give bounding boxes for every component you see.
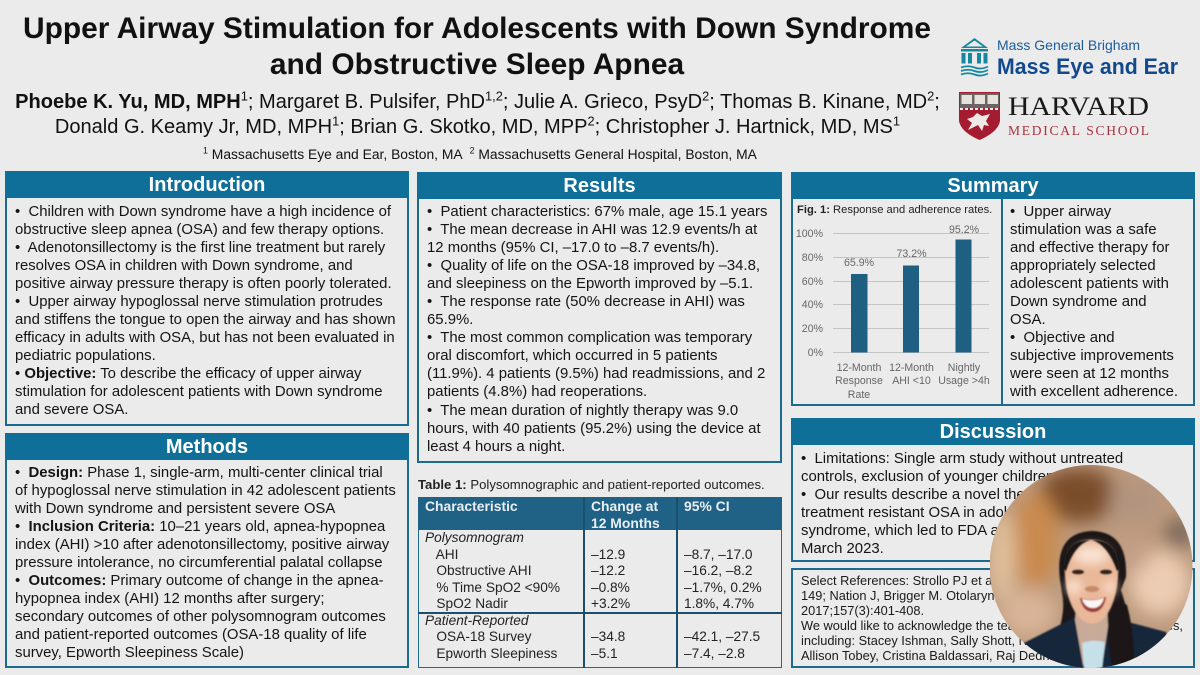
text: discussion bullets: • Limitations: Single arm study without untreated xyxy=(801,450,1123,466)
logo: Harvard Medical School xyxy=(959,91,1149,140)
text: summary bullets: stimulation was a safe xyxy=(1010,222,1156,238)
text: methods bullets: and patient-reported outcomes (OSA-18 quality of life xyxy=(15,627,367,643)
text: introduction bullets: and severe OSA. xyxy=(15,402,128,418)
text: summary bullets: • Objective and xyxy=(1010,330,1115,346)
header label: Change at xyxy=(591,498,658,514)
heading: results xyxy=(417,172,782,199)
text: summary bullets: and effective therapy for xyxy=(1010,240,1170,256)
text: summary bullets xyxy=(1010,204,1178,400)
title xyxy=(23,12,931,81)
text: results bullets: 65.9%. xyxy=(427,312,473,328)
text: results bullets: (11.9%). 4 patients (9.5%) had readmissions, and 2 xyxy=(427,366,765,382)
text: references: 149; Nation J, Brigger M. Otolaryng xyxy=(801,588,1002,603)
text: summary bullets: with excellent adherence. xyxy=(1010,384,1178,400)
text: discussion bullets: syndrome, which led to FDA approval in xyxy=(801,523,1063,539)
y axis labels: 100% xyxy=(796,228,824,240)
category labels xyxy=(835,362,990,401)
text: introduction bullets: obstructive sleep apnea (OSA) and few therapy options. xyxy=(15,222,384,238)
category labels: Rate xyxy=(848,389,870,401)
text: discussion bullets: • Our results describe a novel therapy for xyxy=(801,487,1075,503)
text: introduction bullets: resolves OSA in children with Down syndrome, and xyxy=(15,258,353,274)
photo: presenter portrait in circular frame xyxy=(990,465,1192,668)
confidence interval values: –42.1, –27.5 xyxy=(684,629,760,644)
text: summary bullets: subjective improvements xyxy=(1010,348,1174,364)
text: methods bullets: • Outcomes: Primary outcome of change in the apnea- xyxy=(15,573,384,589)
panel: methods xyxy=(5,433,409,668)
text: results bullets: • The response rate (50% decrease in AHI) was xyxy=(427,294,745,310)
panel: results xyxy=(417,172,782,463)
y axis labels xyxy=(796,228,824,359)
logo: Mass General Brigham Mass Eye and Ear xyxy=(960,37,1178,79)
title: Upper Airway Stimulation for Adolescents with Down Syndrome xyxy=(23,12,931,45)
text: results bullets: least 4 hours a night. xyxy=(427,439,565,455)
bar value labels: 73.2% xyxy=(896,248,927,260)
change column values: +3.2% xyxy=(591,596,630,611)
text: introduction bullets: • Objective: To describe the efficacy of upper airway xyxy=(15,366,362,382)
header label xyxy=(591,498,660,531)
change column values xyxy=(591,547,630,661)
confidence interval values: –7.4, –2.8 xyxy=(684,646,745,661)
hair parting xyxy=(1063,540,1090,571)
heading: discussion xyxy=(791,418,1195,445)
text: methods bullets: hypopnea index (AHI) 12 months after surgery; xyxy=(15,591,325,607)
neck xyxy=(1074,612,1110,666)
bar chart: response and adherence rates xyxy=(796,224,990,401)
text: summary bullets: OSA. xyxy=(1010,312,1046,328)
text: results bullets: • Quality of life on the OSA-18 improved by –34.8, xyxy=(427,258,760,274)
category labels: Nightly xyxy=(948,362,981,374)
first column labels: Polysomnogram xyxy=(425,530,524,545)
text: discussion bullets: controls, exclusion of younger children. xyxy=(801,469,1058,485)
first column labels: Obstructive AHI xyxy=(436,563,532,578)
text: references: including: Stacey Ishman, Sally Shott, N xyxy=(801,633,1028,648)
panel: introduction xyxy=(5,171,409,426)
y axis labels: 60% xyxy=(802,276,824,288)
panel: discussion xyxy=(791,418,1195,562)
logo: Harvard Medical School: MEDICAL SCHOOL xyxy=(1008,123,1149,138)
nose xyxy=(1085,586,1099,592)
face xyxy=(1065,540,1118,624)
category labels: Response xyxy=(835,375,883,387)
confidence interval values: –8.7, –17.0 xyxy=(684,547,752,562)
authors: Donald G. Keamy Jr, MD, MPH1; Brian G. Skotko, MD, MPP2; Christopher J. Hartnick, MD, MS1 xyxy=(55,113,900,138)
first column labels: OSA-18 Survey xyxy=(436,629,532,644)
first column labels: AHI xyxy=(436,547,458,562)
bar value labels: 65.9% xyxy=(844,257,875,269)
text: introduction bullets: pediatric populations. xyxy=(15,348,156,364)
logo: Harvard Medical School: HARVARD xyxy=(1008,91,1149,121)
text: methods bullets: secondary outcomes of other polysomnogram outcomes xyxy=(15,609,386,625)
divider between figure and text xyxy=(1001,199,1003,406)
header labels: Characteristic xyxy=(425,498,518,514)
text: references: We would like to acknowledge the teams at all participating xyxy=(801,618,1135,633)
confidence interval values xyxy=(684,547,762,661)
first column labels: Patient-Reported xyxy=(425,613,528,628)
heading: introduction: Introduction xyxy=(149,174,265,196)
text: introduction bullets: • Upper airway hypoglossal nerve stimulation protrudes xyxy=(15,294,383,310)
change column values: –34.8 xyxy=(591,629,625,644)
text: introduction bullets: positive airway pressure therapy is often poorly tolerated. xyxy=(15,276,392,292)
text: results bullets: patients (4.8%) had reoperations. xyxy=(427,384,647,400)
text: introduction bullets: efficacy in adults with OSA, but has not been evaluated in xyxy=(15,330,395,346)
text: methods bullets: of hypoglossal nerve stimulation in 42 adolescent patients xyxy=(15,483,396,499)
y axis labels: 80% xyxy=(802,252,824,264)
heading: methods: Methods xyxy=(166,436,248,458)
bars xyxy=(851,240,972,352)
text: results bullets: hours, with 40 patients (95.2%) using the device at xyxy=(427,421,761,437)
bar value labels: 95.2% xyxy=(949,224,980,236)
authors xyxy=(15,88,940,138)
change column values: –12.2 xyxy=(591,563,625,578)
blurred background xyxy=(988,468,1196,637)
text: end of acknowledgement line: sites, xyxy=(1153,618,1183,633)
text: references: Select References: Strollo PJ et al. xyxy=(801,573,999,588)
heading: discussion: Discussion xyxy=(940,421,1046,443)
row divider xyxy=(418,612,782,614)
hair xyxy=(1024,530,1168,668)
text: methods bullets: • Design: Phase 1, single-arm, multi-center clinical trial xyxy=(15,464,383,480)
text: summary bullets: • Upper airway xyxy=(1010,204,1111,220)
heading: introduction xyxy=(5,171,409,198)
text: methods bullets: • Inclusion Criteria: 10–21 years old, apnea-hypopnea xyxy=(15,519,385,535)
title: and Obstructive Sleep Apnea xyxy=(270,48,684,81)
text: methods bullets: survey, Epworth Sleepiness Scale) xyxy=(15,645,244,661)
column divider xyxy=(676,497,678,668)
table header row xyxy=(418,497,782,530)
bar value labels xyxy=(844,224,980,269)
confidence interval values: –16.2, –8.2 xyxy=(684,563,752,578)
text: summary bullets: appropriately selected xyxy=(1010,258,1156,274)
heading: methods xyxy=(5,433,409,460)
first column labels: % Time SpO2 <90% xyxy=(436,580,560,595)
table caption: Table 1: Polysomnographic and patient-reported outcomes. xyxy=(418,477,765,492)
table: outcomes xyxy=(418,497,782,668)
change column values: –0.8% xyxy=(591,580,630,595)
first column labels xyxy=(425,530,560,661)
text: results bullets: • The mean decrease in AHI was 12.9 events/h at xyxy=(427,222,757,238)
text: results bullets: • Patient characteristics: 67% male, age 15.1 years xyxy=(427,204,767,220)
blazer xyxy=(1024,616,1168,668)
column divider xyxy=(583,497,584,668)
text: discussion bullets: March 2023. xyxy=(801,541,884,557)
figure caption: Fig. 1: Response and adherence rates. xyxy=(797,204,992,216)
text: methods bullets: index (AHI) >10 after adenotonsillectomy, positive airway xyxy=(15,537,389,553)
text: results bullets: 12 months (95% CI, –17.0 to –8.7 events/h). xyxy=(427,240,719,256)
category labels: Usage >4h xyxy=(938,375,990,387)
mouth xyxy=(1080,597,1106,612)
text: summary bullets: Down syndrome and xyxy=(1010,294,1147,310)
text: results bullets xyxy=(427,204,767,455)
change column values: –12.9 xyxy=(591,547,625,562)
text: introduction bullets: • Adenotonsillectomy is the first line treatment but rarely xyxy=(15,240,385,256)
first column labels: Epworth Sleepiness xyxy=(436,646,557,661)
confidence interval values: 1.8%, 4.7% xyxy=(684,596,754,611)
category labels: 12-Month xyxy=(837,362,881,374)
heading: results: Results xyxy=(563,175,636,197)
authors: Phoebe K. Yu, MD, MPH1; Margaret B. Pulsifer, PhD1,2; Julie A. Grieco, PsyD2; Thomas B. Kinane, MD2; xyxy=(15,88,940,113)
text: references xyxy=(801,573,1135,663)
text: methods bullets: pressure intolerance, no circumferential palatal collapse xyxy=(15,555,382,571)
text: results bullets: oral discomfort, which occurred in 5 patients xyxy=(427,348,718,364)
text: discussion bullets: treatment resistant OSA in adolescents with Down xyxy=(801,505,1131,521)
y axis labels: 20% xyxy=(802,323,824,335)
y axis labels: 0% xyxy=(808,347,824,359)
hair over blazer xyxy=(1108,603,1134,666)
text: results bullets: • The mean duration of nightly therapy was 9.0 xyxy=(427,403,738,419)
confidence interval values: –1.7%, 0.2% xyxy=(684,580,762,595)
affiliations: 1 Massachusetts Eye and Ear, Boston, MA 2 Massachusetts General Hospital, Boston, MA xyxy=(203,145,757,162)
text: references: 2017;157(3):401-408. xyxy=(801,603,924,618)
text: summary bullets: were seen at 12 months xyxy=(1010,366,1169,382)
facial highlights xyxy=(1067,546,1116,594)
logo: Mass General Brigham Mass Eye and Ear: Mass Eye and Ear xyxy=(997,54,1178,79)
logo: Mass General Brigham Mass Eye and Ear: Mass General Brigham xyxy=(997,37,1140,53)
text: references: Allison Tobey, Cristina Baldassari, Raj Dedhia xyxy=(801,648,1059,663)
heading: summary xyxy=(791,172,1195,199)
text: introduction bullets: • Children with Down syndrome have a high incidence of xyxy=(15,204,391,220)
text: results bullets: and sleepiness on the Epworth improved by –5.1. xyxy=(427,276,753,292)
panel: summary xyxy=(791,172,1195,406)
text: discussion bullets xyxy=(801,450,1131,557)
text: introduction bullets xyxy=(15,204,396,418)
text: introduction bullets: stimulation for adolescent patients with Down syndrome xyxy=(15,384,382,400)
text: summary bullets: adolescent patients with xyxy=(1010,276,1169,292)
y axis labels: 40% xyxy=(802,299,824,311)
first column labels: SpO2 Nadir xyxy=(436,596,508,611)
category labels: 12-Month xyxy=(889,362,934,374)
header label: 12 Months xyxy=(591,515,660,531)
text: methods bullets xyxy=(15,464,396,661)
heading: summary: Summary xyxy=(947,175,1039,197)
text: introduction bullets: and stiffens the tongue to open the airway and has shown xyxy=(15,312,396,328)
category labels: AHI <10 xyxy=(892,375,931,387)
text: methods bullets: with Down syndrome and persistent severe OSA xyxy=(15,501,335,517)
panel: references and acknowledgements xyxy=(791,568,1195,668)
eyes xyxy=(1072,570,1084,574)
text: results bullets: • The most common complication was temporary xyxy=(427,330,752,346)
change column values: –5.1 xyxy=(591,646,618,661)
header label: 95% CI xyxy=(684,498,730,514)
